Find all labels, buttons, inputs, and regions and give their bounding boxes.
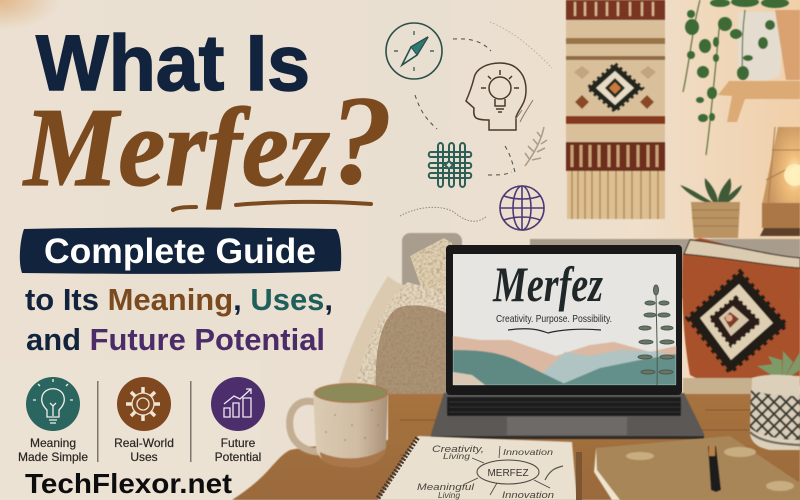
decorative cushion bbox=[682, 238, 800, 396]
pen bbox=[708, 446, 721, 492]
icon: woven knot bbox=[429, 143, 471, 187]
table lamp bbox=[760, 127, 800, 236]
screen tagline: Creativity. Purpose. Possibility. bbox=[496, 313, 612, 325]
feature: Real-World Uses bbox=[114, 377, 174, 464]
laptop base bbox=[431, 393, 704, 439]
notebook sketch notes: Living bbox=[443, 452, 471, 461]
subtitle lines bbox=[25, 282, 333, 357]
merfez bubble: MERFEZ bbox=[487, 468, 529, 479]
sofa bbox=[402, 233, 800, 299]
screen plant bbox=[638, 285, 674, 385]
decorative dashed paths and sprig bbox=[400, 22, 552, 221]
icon: globe bbox=[500, 186, 544, 230]
icon: head with lightbulb bbox=[466, 63, 533, 130]
succulent in patterned pot bbox=[750, 351, 800, 450]
screen title: Merfez bbox=[492, 256, 603, 312]
screen swoosh bbox=[508, 329, 601, 333]
coffee mug bbox=[290, 383, 388, 467]
divider bbox=[97, 381, 98, 462]
divider bbox=[190, 381, 192, 462]
notebook sketch notes: Innovation bbox=[503, 447, 553, 457]
notebook sketch notes: Meaningful bbox=[417, 482, 475, 492]
label: Made Simple bbox=[18, 450, 88, 464]
title: Merfez?: ? bbox=[329, 69, 393, 211]
icon: compass bbox=[386, 23, 442, 79]
label: Potential bbox=[215, 450, 261, 464]
notebook sketch notes bbox=[417, 444, 554, 500]
potted plant on shelf bbox=[680, 178, 742, 238]
label: Uses bbox=[130, 450, 158, 464]
closed book with pen bbox=[594, 436, 800, 500]
subtitle lines: and Future Potential bbox=[26, 322, 325, 357]
title: What Is: What Is bbox=[36, 18, 310, 107]
screen mountains bbox=[453, 336, 676, 385]
icon: lightbulb badge bbox=[26, 377, 80, 431]
label: Real-World bbox=[114, 436, 174, 450]
laptop screen bezel bbox=[446, 245, 682, 395]
sketch notebook bbox=[378, 436, 582, 500]
wooden table bbox=[232, 394, 800, 500]
merfez bubble bbox=[477, 460, 539, 484]
label: Future bbox=[221, 436, 256, 450]
feature: Future Potential bbox=[211, 377, 265, 464]
knitted blanket and pillow bbox=[339, 238, 452, 395]
subtitle lines: to Its Meaning, Uses, bbox=[25, 282, 333, 317]
label: Meaning bbox=[30, 436, 76, 450]
laptop bbox=[431, 245, 704, 439]
feature: Meaning Made Simple bbox=[18, 377, 88, 464]
title: Merfez?: Merfez bbox=[22, 86, 330, 210]
hanging plant and shelf bbox=[683, 0, 800, 155]
icon: growth chart badge bbox=[211, 377, 265, 431]
subtitle banner: Complete Guide bbox=[44, 232, 316, 271]
notebook sketch notes: Living bbox=[438, 491, 461, 500]
icon: gear badge bbox=[117, 377, 171, 431]
laptop screen bbox=[453, 254, 676, 385]
wall hanging bbox=[566, 0, 665, 219]
site name: TechFlexor.net bbox=[25, 468, 232, 499]
sprig bbox=[525, 127, 547, 166]
notebook sketch notes: Innovation bbox=[502, 490, 554, 500]
notebook sketch notes: Creativity, bbox=[432, 444, 484, 454]
